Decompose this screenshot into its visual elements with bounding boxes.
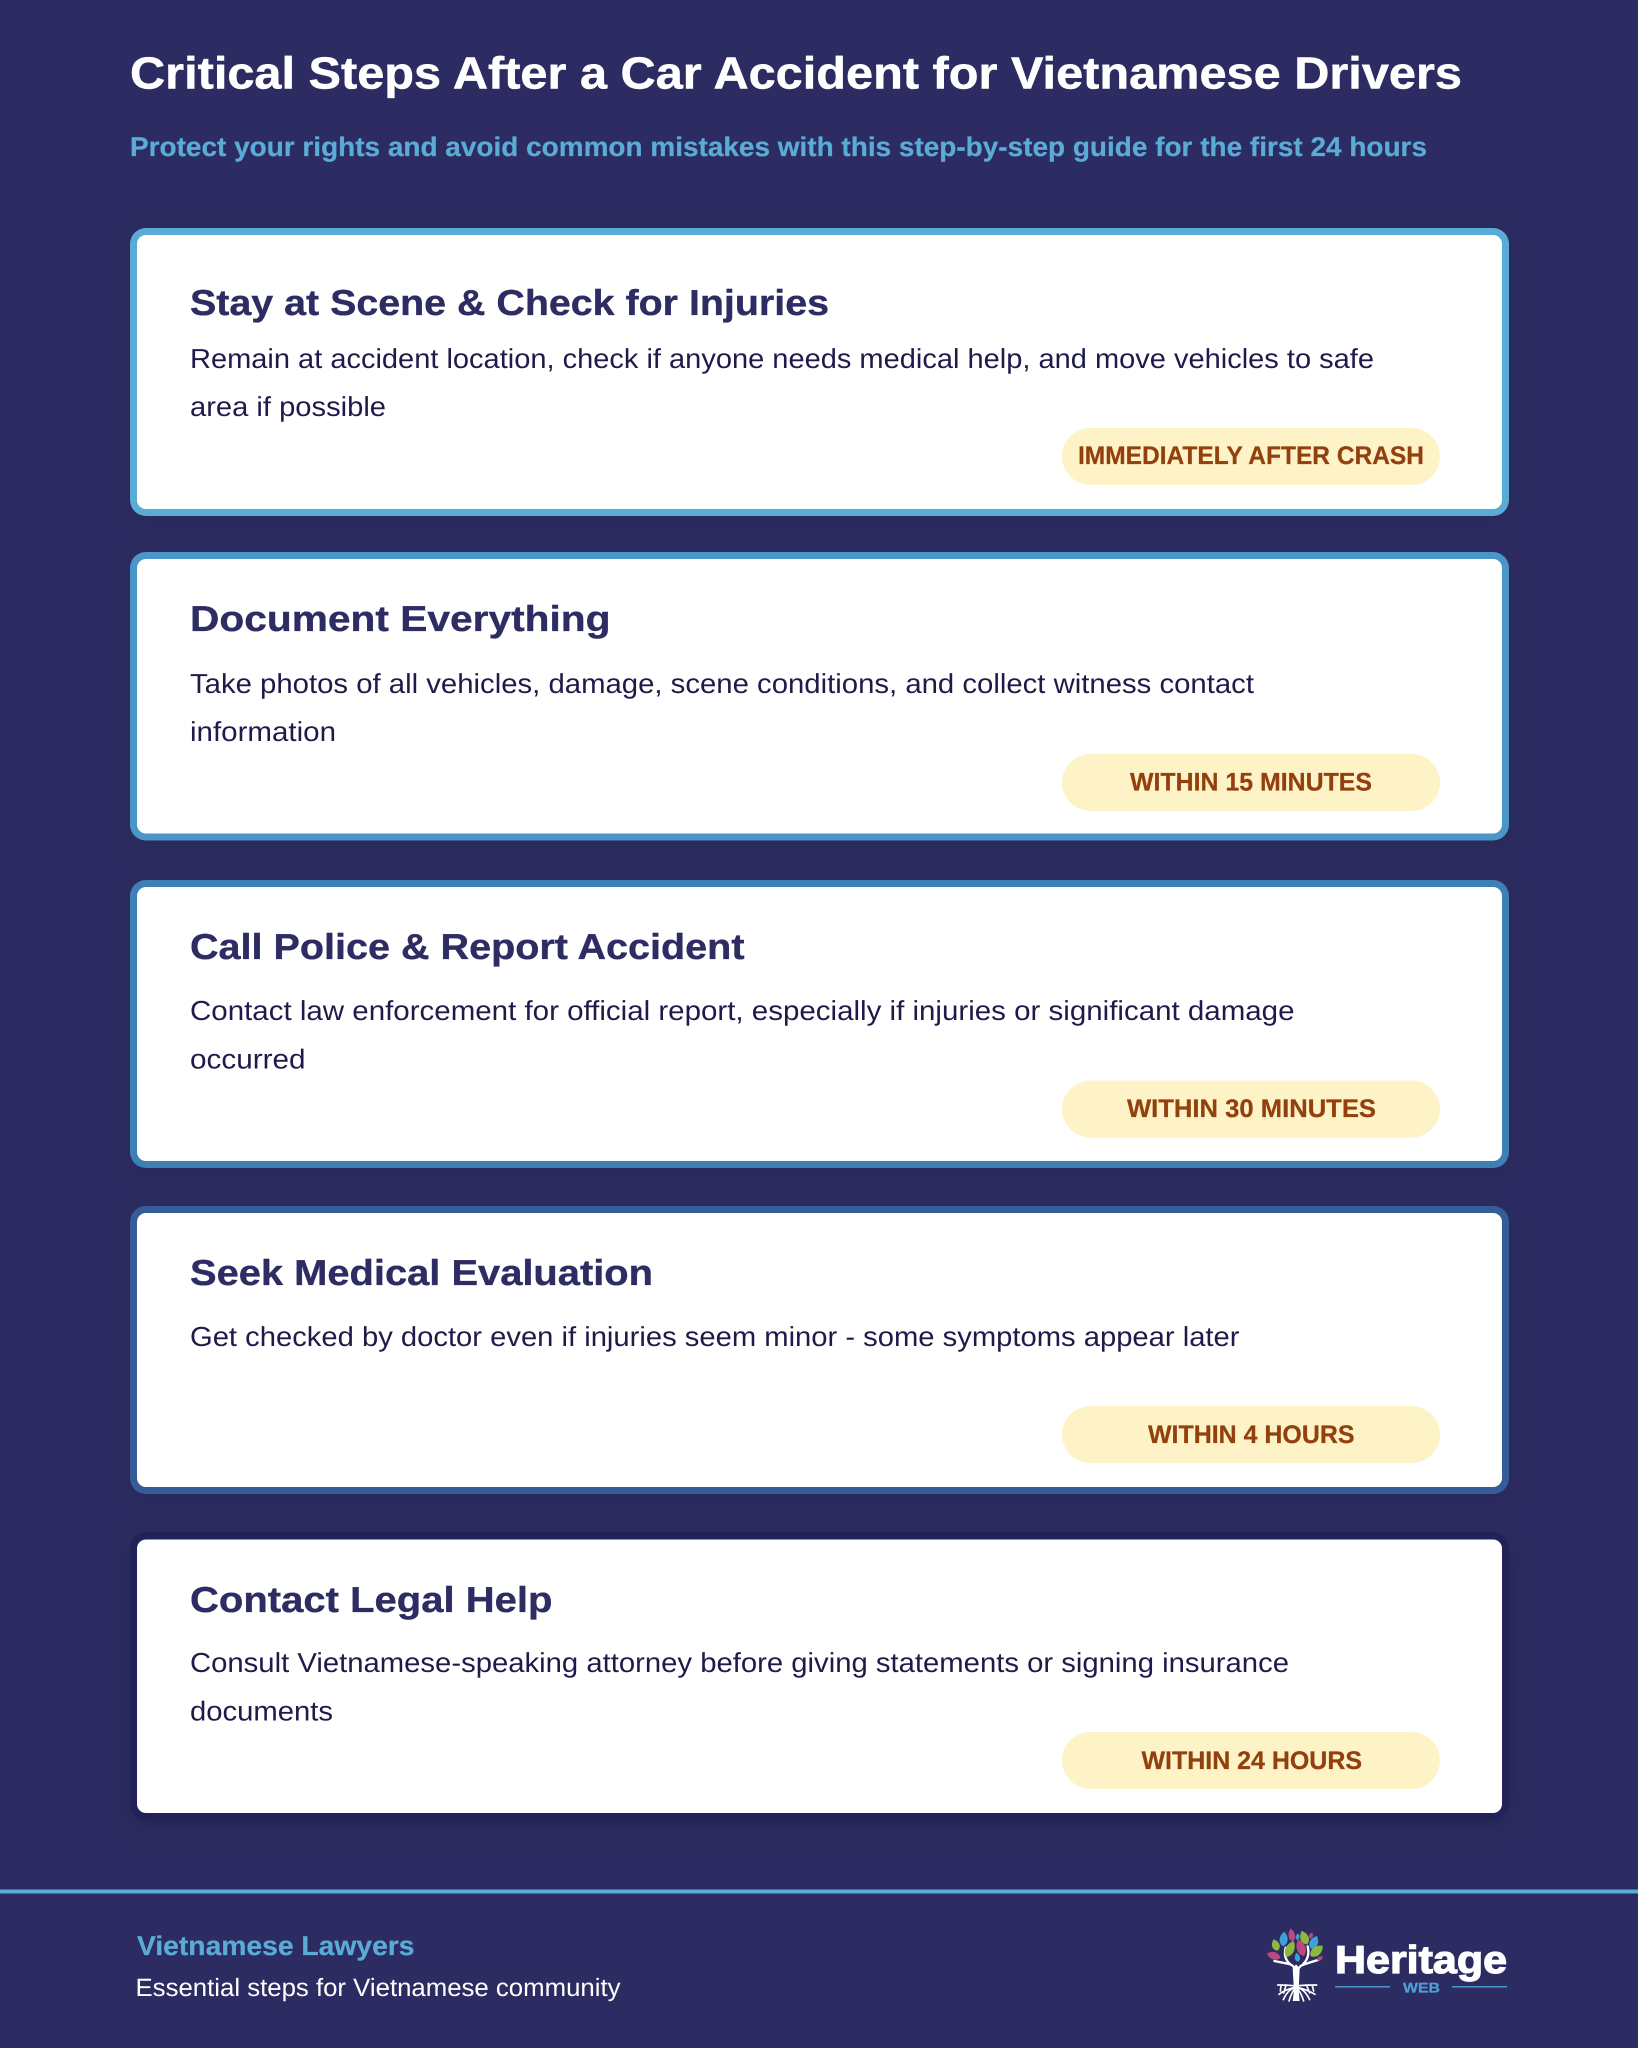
step 1 heading: Stay at Scene & Check for Injuries xyxy=(190,282,829,323)
footer brand name: Vietnamese Lawyers xyxy=(137,1931,414,1961)
step 3 description: occurred xyxy=(190,1044,306,1074)
logo sub-line: WEB xyxy=(1403,1980,1440,1996)
step 1 description: Remain at accident location, check if anyone needs medical help, and move vehicles to safe xyxy=(190,343,1374,374)
step 2 description: information xyxy=(190,716,336,747)
step 1 description xyxy=(190,343,1374,422)
step 3 description xyxy=(190,995,1294,1074)
footer tagline: Essential steps for Vietnamese community xyxy=(136,1974,621,2002)
panel: step 5 contact legal help xyxy=(130,1532,1509,1820)
step 3 timing badge xyxy=(1062,1080,1440,1138)
panel: step 4 seek medical evaluation xyxy=(130,1206,1509,1494)
panel: step 2 document everything xyxy=(130,552,1509,840)
step 1 description: area if possible xyxy=(190,391,386,422)
step 2 description xyxy=(190,668,1254,747)
step 3 timing badge: WITHIN 30 MINUTES xyxy=(1127,1095,1376,1123)
step 4 description: Get checked by doctor even if injuries seem minor - some symptoms appear later xyxy=(190,1321,1240,1352)
step 2 heading: Document Everything xyxy=(190,598,610,639)
subtitle: Protect your rights and avoid common mistakes with this step-by-step guide for the first 24 hours xyxy=(130,132,1427,162)
step 4 timing badge: WITHIN 4 HOURS xyxy=(1148,1421,1354,1449)
panel: step 1 stay at scene xyxy=(130,228,1509,516)
step 1 timing badge xyxy=(1062,428,1440,485)
step 2 timing badge: WITHIN 15 MINUTES xyxy=(1130,768,1372,796)
step 4 heading: Seek Medical Evaluation xyxy=(190,1252,653,1293)
step 5 timing badge: WITHIN 24 HOURS xyxy=(1142,1747,1362,1775)
logo wordmark: Heritage xyxy=(1335,1939,1507,1982)
icon: tree with coloured leaves xyxy=(1266,1928,1326,2001)
title: Critical Steps After a Car Accident for Vietnamese Drivers xyxy=(130,48,1462,98)
step 2 description: Take photos of all vehicles, damage, scene conditions, and collect witness contact xyxy=(190,668,1254,699)
footer divider xyxy=(0,1890,1638,1894)
panel: step 3 call police xyxy=(130,880,1509,1168)
step 5 description: documents xyxy=(190,1696,333,1726)
logo: Heritage Web xyxy=(1266,1928,1507,2001)
step 5 description: Consult Vietnamese-speaking attorney before giving statements or signing insurance xyxy=(190,1647,1289,1678)
step 3 heading: Call Police & Report Accident xyxy=(190,926,745,967)
step 5 description xyxy=(190,1647,1289,1726)
step 4 timing badge xyxy=(1062,1406,1440,1463)
step 3 description: Contact law enforcement for official report, especially if injuries or significant damage xyxy=(190,995,1294,1026)
step 5 timing badge xyxy=(1062,1732,1440,1789)
step 2 timing badge xyxy=(1062,754,1440,811)
step 1 timing badge: IMMEDIATELY AFTER CRASH xyxy=(1078,442,1424,470)
step 5 heading: Contact Legal Help xyxy=(190,1579,552,1620)
